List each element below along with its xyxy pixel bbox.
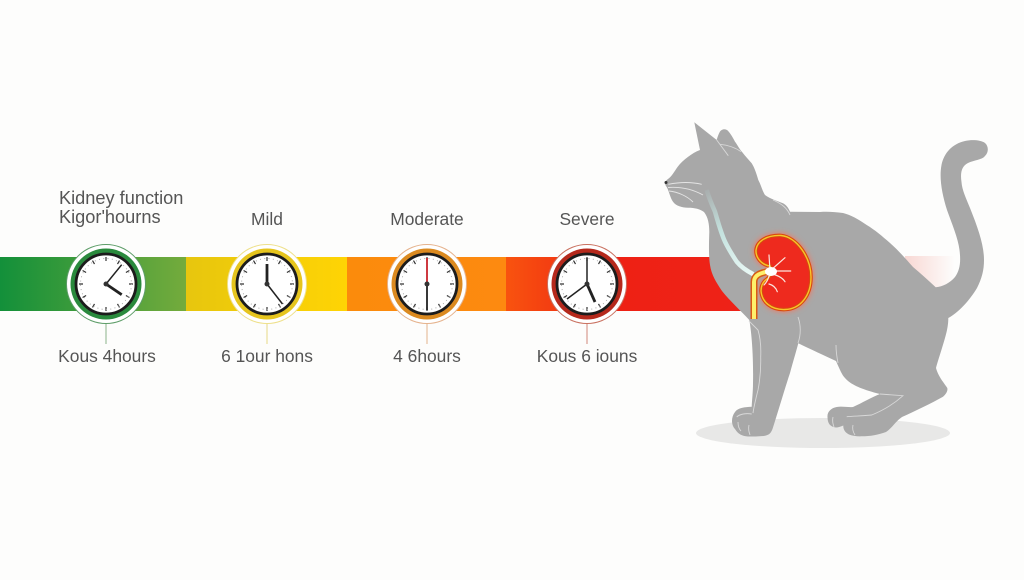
label: mild: Mild: [251, 209, 283, 229]
heading: kidney function: Kigor'hourns: [59, 207, 161, 227]
label: severe: Severe: [559, 209, 615, 229]
label: hours 2: 6 1our hons: [221, 346, 313, 366]
clock: green: [66, 244, 146, 324]
connector lines: [106, 324, 587, 344]
cat nose: [664, 181, 668, 184]
ureter: [754, 271, 770, 319]
renal branches: [764, 255, 791, 292]
ground shadow: [696, 418, 950, 448]
clock: yellow: [228, 244, 306, 324]
label: hours 1: Kous 4hours: [58, 346, 156, 366]
clock: orange: [388, 244, 466, 324]
label: hours 4: Kous 6 iouns: [537, 346, 638, 366]
label: hours 3: 4 6hours: [393, 346, 461, 366]
cat silhouette: [665, 122, 988, 437]
fur lines: [717, 140, 903, 435]
whiskers: [668, 183, 703, 202]
nerve line: [707, 190, 753, 274]
clock: red: [548, 244, 626, 324]
icon: kidney: [754, 235, 811, 319]
label: moderate: Moderate: [390, 209, 464, 229]
severity gradient bar: [0, 256, 955, 311]
heading: kidney function: Kidney function: [59, 188, 183, 208]
heading: kidney function: [59, 188, 183, 227]
cat illustration: [664, 122, 988, 437]
